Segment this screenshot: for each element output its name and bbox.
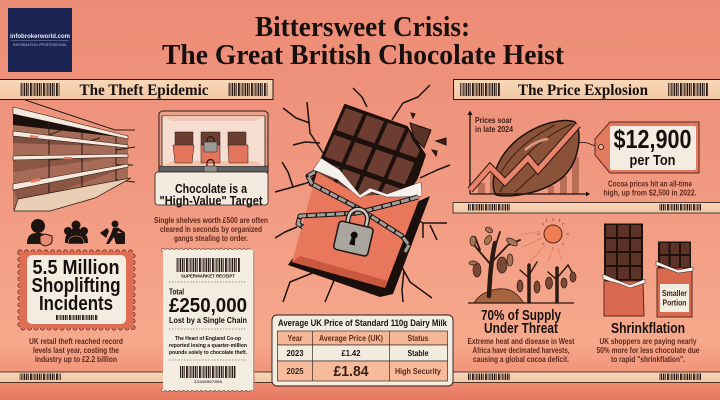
icon: gang xyxy=(64,220,88,244)
mid band right xyxy=(453,202,720,213)
text: shrinkflation: 50% more for less chocolate due xyxy=(596,346,700,355)
text: shrinkflation: Shrinkflation xyxy=(611,320,685,337)
table text: 2023 xyxy=(286,348,304,358)
padlock xyxy=(333,205,377,257)
panel: 5.5 million shoplifting incidents ticket: Incidents xyxy=(39,293,113,315)
illustration: sun and dying cocoa trees xyxy=(468,218,576,303)
table title: Average UK Price of Standard 110g Dairy Milk xyxy=(278,318,448,328)
table text: Average Price (UK) xyxy=(319,333,383,343)
panel: receipt: Lost by a Single Chain xyxy=(169,315,247,325)
panel: 5.5 million shoplifting incidents ticket: 5.5 Million xyxy=(32,257,120,279)
panel: 5.5 million shoplifting incidents ticket: Shoplifting xyxy=(32,275,120,297)
text: shelves worth: gangs stealing to order. xyxy=(174,234,248,243)
heading band: The Price Explosion xyxy=(454,80,720,100)
panel: receipt: The Heart of England Co-op xyxy=(175,336,242,342)
illustration: wall cracks xyxy=(275,85,450,302)
broken chocolate pieces xyxy=(410,113,446,156)
logo xyxy=(8,8,72,72)
footer band left xyxy=(0,372,279,382)
panel: price table xyxy=(272,315,453,386)
label: chocolate high-value target: "High-Value" Target xyxy=(160,193,263,208)
panel: receipt: reported losing a quarter-million xyxy=(169,343,248,349)
table grid xyxy=(278,331,448,381)
rising trend arrow xyxy=(470,125,578,190)
text: UK retail theft xyxy=(29,337,123,364)
illustration: empty shelves xyxy=(13,100,135,211)
table text: Year xyxy=(288,333,303,343)
cocoa pod xyxy=(493,121,579,196)
title: Bittersweet Crisis: xyxy=(255,12,470,43)
table text: £1.84 xyxy=(334,363,369,380)
panel: receipt xyxy=(163,250,255,391)
text: UK retail theft: industry up to £2.2 billion xyxy=(35,355,117,364)
table text: Status xyxy=(408,333,429,343)
text: shrinkflation: UK shoppers are paying nearly xyxy=(600,337,697,346)
panel: receipt: Total xyxy=(169,288,184,296)
text: 70% of supply: 70% of Supply xyxy=(481,307,562,324)
text: shelves worth: cleared in seconds by organized xyxy=(160,225,262,234)
chocolate block xyxy=(308,104,426,196)
table text: High Security xyxy=(395,366,441,376)
illustration: smaller chocolate bar: Smaller xyxy=(662,288,688,298)
heading band: The Price Explosion: The Price Explosion xyxy=(518,82,648,99)
chart label: Prices soar xyxy=(475,116,512,125)
logo: infobrokerworld.com xyxy=(10,34,70,40)
footer band right xyxy=(450,372,720,382)
panel: 5.5 million shoplifting incidents ticket xyxy=(20,252,133,328)
chart label xyxy=(475,116,513,134)
background bars xyxy=(478,157,579,194)
logo: INFORMATION PROFESSIONAL xyxy=(13,43,67,47)
table text xyxy=(286,333,441,380)
price tag: $12,900 per ton: per Ton xyxy=(630,152,676,169)
illustration: large chocolate bar xyxy=(603,224,645,316)
chart: cocoa pod price rise xyxy=(468,110,590,196)
illustration: locked display case xyxy=(159,111,268,177)
text: UK retail theft: UK retail theft reached record xyxy=(29,337,123,346)
panel: receipt: SUPERMARKET RECEIPT xyxy=(181,274,235,280)
text: 70% of supply: Africa have decimated harvests, xyxy=(472,346,570,355)
text: UK retail theft: levels last year, costing the xyxy=(33,346,119,355)
title xyxy=(162,12,565,71)
text: shelves worth: Single shelves worth £500 are often xyxy=(154,216,268,225)
chart label: in late 2024 xyxy=(475,125,513,134)
wrapper xyxy=(288,196,430,297)
illustration: smaller chocolate bar xyxy=(656,242,693,317)
text: shrinkflation: to rapid "shrinkflation". xyxy=(611,355,685,364)
illustration: smaller chocolate bar: Portion xyxy=(662,298,686,308)
price tag: $12,900 per ton: $12,900 xyxy=(614,124,692,154)
table text: £1.42 xyxy=(342,348,361,358)
icon: masked thief xyxy=(27,219,52,246)
table text: 2025 xyxy=(286,366,304,376)
text: cocoa prices: high, up from $2,500 in 2022. xyxy=(604,188,696,198)
panel: receipt: £250,000 xyxy=(169,295,247,317)
panel: receipt: 23345567896 xyxy=(194,379,223,384)
text: 70% of supply: Extreme heat and disease in West xyxy=(468,337,575,346)
text: shelves worth xyxy=(154,216,268,243)
chains xyxy=(298,172,418,252)
panel: receipt: pounds solely to chocolate theft. xyxy=(169,350,247,356)
illustration: chained chocolate bar xyxy=(288,105,446,297)
text: 70% of supply xyxy=(468,307,575,364)
price tag: $12,900 per ton xyxy=(578,122,699,173)
table text: Stable xyxy=(408,348,429,358)
text: cocoa prices xyxy=(604,180,696,198)
label: chocolate high-value target xyxy=(155,172,268,208)
title: The Great British Chocolate Heist xyxy=(162,40,565,71)
text: 70% of supply: causing a global cocoa deficit. xyxy=(473,355,569,364)
label: chocolate high-value target: Chocolate is a xyxy=(175,181,248,196)
text: shrinkflation xyxy=(596,320,700,364)
text: 70% of supply: Under Threat xyxy=(484,320,558,337)
text: cocoa prices: Cocoa prices hit an all-time xyxy=(608,180,692,188)
heading band: The Theft Epidemic: The Theft Epidemic xyxy=(80,82,208,99)
axes xyxy=(470,113,588,194)
foil xyxy=(313,158,422,198)
icon: shoplifter running with bag xyxy=(100,220,125,244)
heading band: The Theft Epidemic xyxy=(0,80,273,100)
